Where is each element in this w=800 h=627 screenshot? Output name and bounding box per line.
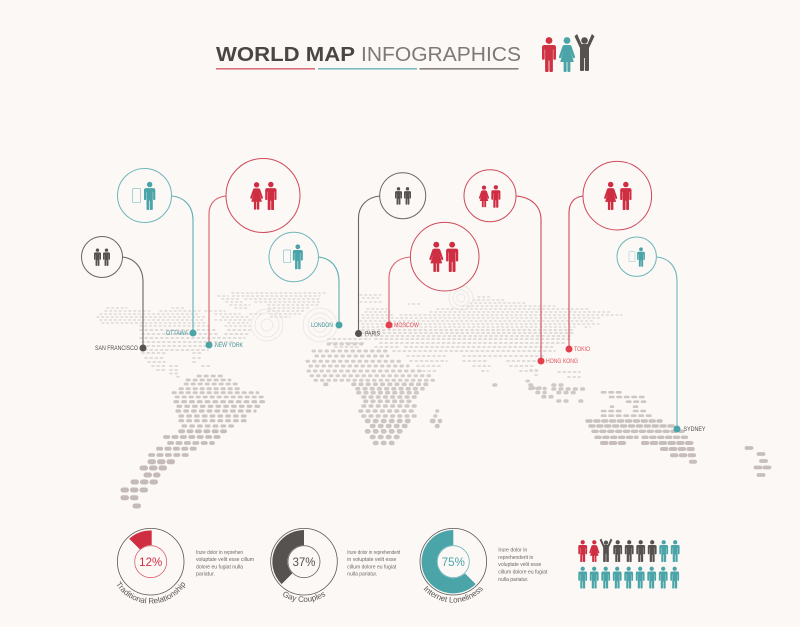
donut segment: teal 75% <box>422 530 476 593</box>
map: australia <box>602 392 653 416</box>
donut: Gay Couples 37% <box>270 528 338 603</box>
text block: first description <box>196 550 254 578</box>
icon: couple grey <box>395 187 411 205</box>
icon: couple grey small <box>94 248 110 266</box>
text block: third description <box>498 548 548 583</box>
dotted world map <box>97 293 770 506</box>
callout: Sydney: SYDNEY <box>684 427 706 433</box>
donut: Internet Loneliness 75% <box>420 528 487 603</box>
text block: second description <box>347 550 401 578</box>
donut: Traditional Relationship 12% <box>116 528 186 604</box>
text block: third description: reprehenderit in <box>498 555 534 561</box>
map: africa north <box>307 344 533 381</box>
callout: Hong Kong <box>464 170 578 365</box>
callout: Moscow: MOSCOW <box>394 323 419 329</box>
callout: Hong Kong: HONG KONG <box>546 359 578 365</box>
icon: tablet and person teal <box>132 182 155 210</box>
text block: third description: Irure dolor in <box>498 548 528 554</box>
donut: Traditional Relationship 12%: 12% <box>139 557 162 569</box>
callout: New York <box>206 158 300 349</box>
text block: first description: voluptate velit esse cillum <box>196 557 254 563</box>
text block: first description: pariatur. <box>196 572 215 578</box>
map: africa south <box>325 384 585 416</box>
callout: Ottawa <box>118 168 196 337</box>
title: WORLD MAP <box>216 44 355 66</box>
icon: couple red <box>250 182 277 210</box>
icon: tablet and person teal <box>284 244 303 269</box>
callout: New York: NEW YORK <box>215 343 243 349</box>
callout: Paris <box>355 173 426 338</box>
text block: second description: Irure dolor in reprehenderit <box>347 550 401 556</box>
callout: Moscow <box>386 222 479 329</box>
title <box>216 44 521 70</box>
donut: Gay Couples 37%: Gay Couples <box>283 592 326 603</box>
donut: Internet Loneliness 75%: 75% <box>442 557 465 569</box>
callout: San Francisco: SAN FRANCISCO <box>95 346 138 352</box>
title: INFOGRAPHICS <box>361 44 521 66</box>
icon: title people <box>542 34 594 72</box>
text block: second description: in voluptate velit esse <box>347 557 397 563</box>
callout: Tokyo <box>566 161 652 353</box>
icon: couple red <box>479 185 500 208</box>
map: northern rows <box>97 293 622 327</box>
icon: couple red <box>604 182 632 210</box>
donut: Internet Loneliness 75%: Internet Loneliness <box>424 586 483 603</box>
text block: second description: nulla pariatur. <box>347 572 377 578</box>
callout: San Francisco <box>82 236 146 352</box>
pictogram: people count <box>578 538 680 588</box>
donut segment: grey 37% <box>272 530 304 584</box>
text block: second description: cillum dolore eu fugiat <box>347 564 397 570</box>
callout: Sydney <box>617 237 706 433</box>
donut: Traditional Relationship 12%: Traditional Relationship <box>116 581 186 604</box>
text block: third description: nulla pariatur. <box>498 577 528 583</box>
map: south america <box>173 376 265 397</box>
callout: London <box>269 232 342 329</box>
map: new zealand <box>746 448 770 475</box>
callout: Ottawa: OTTAWA <box>166 331 188 337</box>
callout: Paris: PARIS <box>365 332 380 338</box>
text block: first description: dolore eu fugiat nulla <box>196 564 243 570</box>
icon: tablet and person teal <box>629 247 645 267</box>
text block: third description: cillum dolore eu fugiat <box>498 570 548 576</box>
donut: Gay Couples 37%: 37% <box>292 557 316 569</box>
donut segment: red 12% <box>129 530 152 550</box>
map: middle northern rows <box>140 330 580 377</box>
callout: Tokyo: TOKIO <box>574 347 590 353</box>
icon: couple red <box>429 242 458 272</box>
callout: London: LONDON <box>311 323 333 329</box>
text block: third description: voluptate velit esse <box>498 562 542 568</box>
text block: first description: Irure dolor in reprehen <box>196 550 243 556</box>
